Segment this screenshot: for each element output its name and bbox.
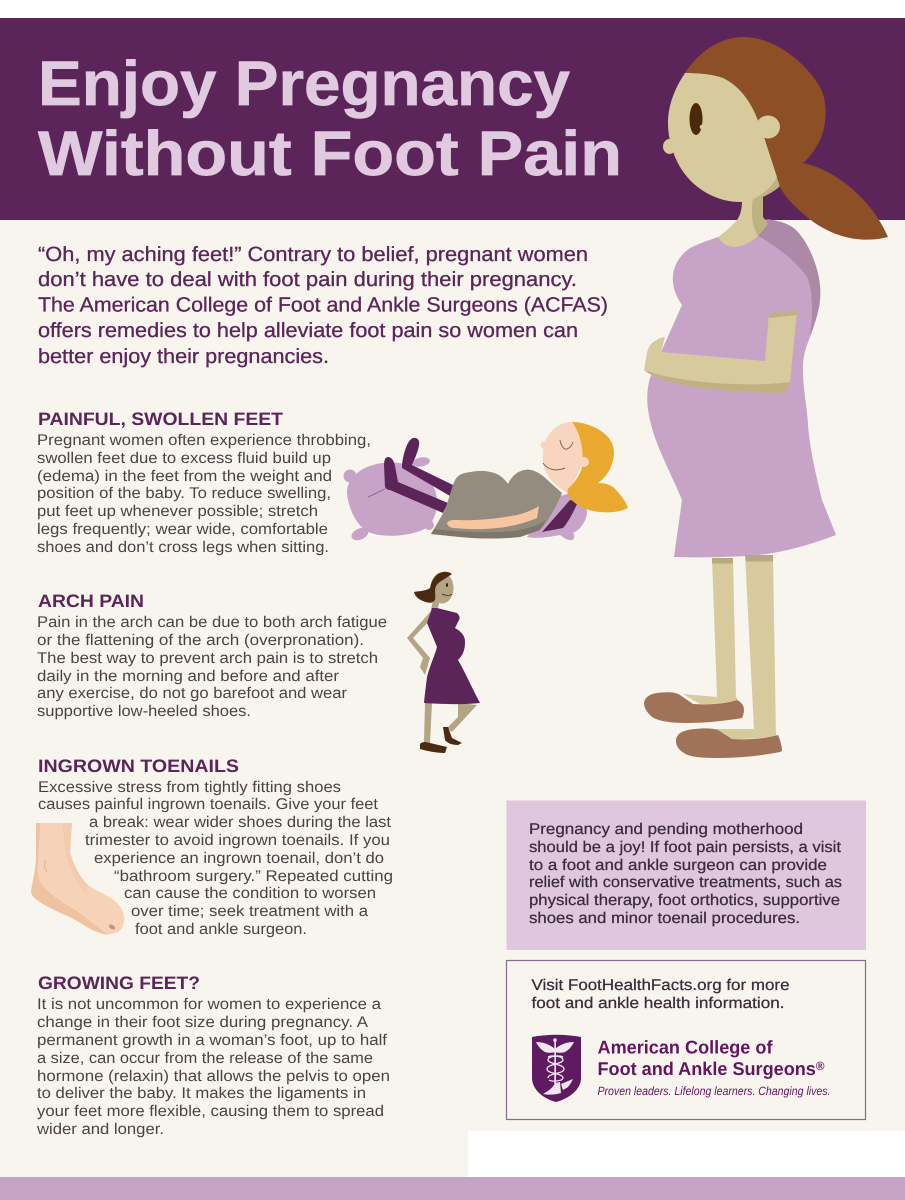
section: painful, swollen feet [37,409,371,556]
text: growing feet: a size, can occur from the release of the same [37,1050,373,1067]
text: arch pain: daily in the morning and before and after [37,668,339,685]
text: growing feet: permanent growth in a woman’s foot, up to half [37,1032,388,1049]
text: arch pain: Pain in the arch can be due to both arch fatigue [37,614,387,631]
text: growing feet: wider and longer. [36,1121,164,1138]
heading: ingrown toenails: INGROWN TOENAILS [38,756,239,776]
text: painful, swollen feet: legs frequently; wear wide, comfortable [37,521,328,538]
intro paragraph: “Oh, my aching feet!” Contrary to belief, pregnant women [38,243,588,266]
text: ACFAS name and tagline [598,1036,830,1098]
header banner [0,18,905,220]
intro paragraph: better enjoy their pregnancies. [38,345,329,368]
text: ingrown toenails: a break: wear wider shoes during the last [89,814,392,831]
text: ACFAS name and tagline: Proven leaders. Lifelong learners. Changing lives. [598,1084,830,1098]
panel: conclusion callout: physical therapy, foot orthotics, supportive [529,892,840,909]
text: arch pain: supportive low-heeled shoes. [37,703,251,720]
panel: conclusion callout: shoes and minor toenail procedures. [529,910,800,927]
icon: ACFAS shield logo [532,1035,581,1102]
text: ACFAS name and tagline: Foot and Ankle Surgeons [598,1058,821,1079]
text: ingrown toenails: experience an ingrown toenail, don’t do [94,850,384,867]
text: painful, swollen feet: Pregnant women often experience throbbing, [37,432,371,449]
text: visit website: Visit FootHealthFacts.org for more [532,977,790,994]
text: growing feet: to deliver the baby. It makes the ligaments in [37,1085,366,1102]
text: visit website: foot and ankle health information. [532,995,784,1012]
illustration: large pregnant woman [644,37,888,758]
panel: conclusion callout: should be a joy! If foot pain persists, a visit [529,839,842,856]
text: painful, swollen feet: put feet up whenever possible; stretch [37,503,318,520]
illustration: woman lying with feet on pillow [344,422,628,543]
heading: growing feet: GROWING FEET? [38,973,200,993]
text: ingrown toenails: can cause the condition to worsen [124,885,376,902]
text: ingrown toenails: “bathroom surgery.” Repeated cutting [114,868,393,885]
title: Without Foot Pain [38,119,622,189]
text: ingrown toenails: foot and ankle surgeon. [135,921,307,938]
text: arch pain: any exercise, do not go barefoot and wear [37,685,347,702]
panel: conclusion callout: Pregnancy and pending motherhood [529,821,803,838]
panel: conclusion callout [506,800,866,950]
text: painful, swollen feet: shoes and don’t cross legs when sitting. [37,539,329,556]
text: ingrown toenails: trimester to avoid ingrown toenails. If you [85,832,390,849]
text: growing feet: change in their foot size during pregnancy. A [37,1014,369,1031]
text: ingrown toenails [38,779,393,938]
illustration: foot with ingrown toenail [31,823,124,934]
intro paragraph: offers remedies to help alleviate foot pain so women can [38,319,578,342]
panel: conclusion callout: to a foot and ankle surgeon can provide [529,857,827,874]
text: ACFAS name and tagline: American College of [598,1036,773,1058]
title [38,49,622,189]
text: painful, swollen feet [37,432,371,556]
text: arch pain [37,614,387,720]
heading: arch pain: ARCH PAIN [38,591,144,611]
panel: website and logo box [506,960,866,1120]
section: growing feet [36,973,390,1138]
text: ingrown toenails: over time; seek treatment with a [131,903,368,920]
section: ingrown toenails [38,756,393,938]
text: arch pain: The best way to prevent arch pain is to stretch [37,650,378,667]
text: arch pain: or the flattening of the arch (overpronation). [37,632,364,649]
intro paragraph: don’t have to deal with foot pain during their pregnancy. [38,268,577,291]
panel: conclusion callout: relief with conservative treatments, such as [529,874,842,891]
title: Enjoy Pregnancy [38,49,570,119]
text: growing feet: your feet more flexible, causing them to spread [37,1103,384,1120]
text: ingrown toenails: causes painful ingrown toenails. Give your feet [38,796,379,813]
text: growing feet [36,996,390,1138]
text: painful, swollen feet: swollen feet due to excess fluid build up [37,450,331,467]
text: painful, swollen feet: (edema) in the feet from the weight and [37,468,332,485]
text: visit website [532,977,790,1012]
illustration: small standing pregnant woman [407,572,480,753]
footer band [0,1177,905,1200]
heading: painful, swollen feet: PAINFUL, SWOLLEN FEET [38,409,283,429]
text: growing feet: It is not uncommon for women to experience a [37,996,381,1013]
intro paragraph: The American College of Foot and Ankle Surgeons (ACFAS) [38,294,608,316]
intro paragraph [38,243,608,368]
text: growing feet: hormone (relaxin) that allows the pelvis to open [37,1068,390,1085]
text: ingrown toenails: Excessive stress from tightly fitting shoes [38,779,341,796]
section: arch pain [37,591,387,720]
text: painful, swollen feet: position of the baby. To reduce swelling, [37,485,331,502]
text: ACFAS name and tagline: ® [816,1059,825,1073]
